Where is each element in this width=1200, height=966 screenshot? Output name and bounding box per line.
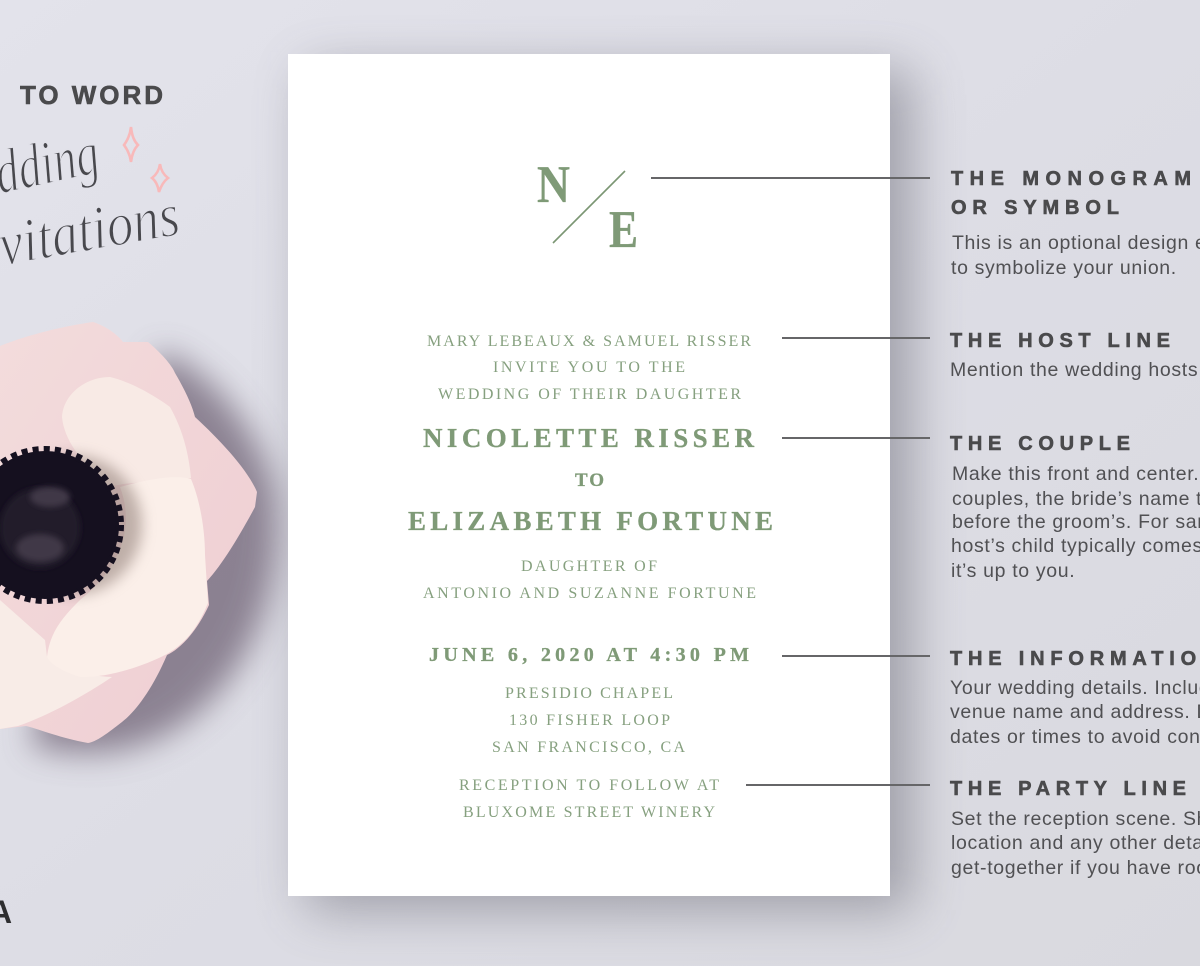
date and venue: PRESIDIO CHAPEL xyxy=(505,685,673,702)
date and venue: 130 FISHER LOOP xyxy=(509,712,670,729)
annotation: the couple: THE COUPLE xyxy=(950,433,1130,455)
host line text: INVITE YOU TO THE xyxy=(493,359,685,376)
date and venue: JUNE 6, 2020 AT 4:30 PM xyxy=(429,644,749,666)
annotation: the couple: it’s up to you. xyxy=(951,560,1075,582)
host line text xyxy=(427,333,751,403)
couple names: NICOLETTE RISSER xyxy=(423,423,754,453)
reception line: RECEPTION TO FOLLOW AT xyxy=(459,777,719,794)
host line text: MARY LEBEAUX & SAMUEL RISSER xyxy=(427,333,751,350)
script title: wedding invitations xyxy=(0,119,184,287)
annotation: the host line xyxy=(950,330,1198,381)
monogram: E xyxy=(609,201,638,259)
couple names: ELIZABETH FORTUNE xyxy=(408,506,773,536)
upper inner petal xyxy=(62,377,191,486)
reception line: BLUXOME STREET WINERY xyxy=(463,804,715,821)
annotation: the host line: THE HOST LINE xyxy=(950,330,1170,352)
host line text: WEDDING OF THEIR DAUGHTER xyxy=(438,386,741,403)
shading around stamens xyxy=(2,455,142,595)
date and venue: SAN FRANCISCO, CA xyxy=(492,739,685,756)
stamen ring xyxy=(0,451,119,599)
annotation: the monogram xyxy=(951,168,1200,279)
annotation: the monogram: THE MONOGRAM xyxy=(951,168,1191,190)
annotation: the couple xyxy=(950,433,1200,582)
annotation: the information xyxy=(950,648,1200,748)
reception line xyxy=(459,777,719,821)
couple names: ANTONIO AND SUZANNE FORTUNE xyxy=(423,585,756,602)
flower centre xyxy=(0,488,80,568)
annotation: the monogram: to symbolize your union. xyxy=(951,257,1177,279)
lower inner petal xyxy=(47,477,208,677)
flower shadow xyxy=(30,350,277,753)
invitation card xyxy=(288,54,890,896)
invitation card shadow xyxy=(306,70,912,910)
couple names xyxy=(408,423,773,602)
annotation: the host line: Mention the wedding hosts xyxy=(950,359,1198,381)
left lower petal xyxy=(0,600,112,729)
monogram xyxy=(537,156,638,259)
flower xyxy=(0,322,277,753)
couple names: TO xyxy=(575,470,604,491)
annotation: the monogram: OR SYMBOL xyxy=(951,197,1119,219)
annotation: the party line: THE PARTY LINE xyxy=(950,778,1186,800)
icon: sparkles xyxy=(124,127,168,192)
back petals xyxy=(0,322,257,743)
monogram: N xyxy=(537,156,570,214)
couple names: DAUGHTER OF xyxy=(521,558,657,575)
date and venue xyxy=(429,644,749,756)
annotation: the party line xyxy=(950,778,1200,879)
leader lines xyxy=(651,178,930,785)
heading: word to word: TO WORD xyxy=(20,80,163,110)
